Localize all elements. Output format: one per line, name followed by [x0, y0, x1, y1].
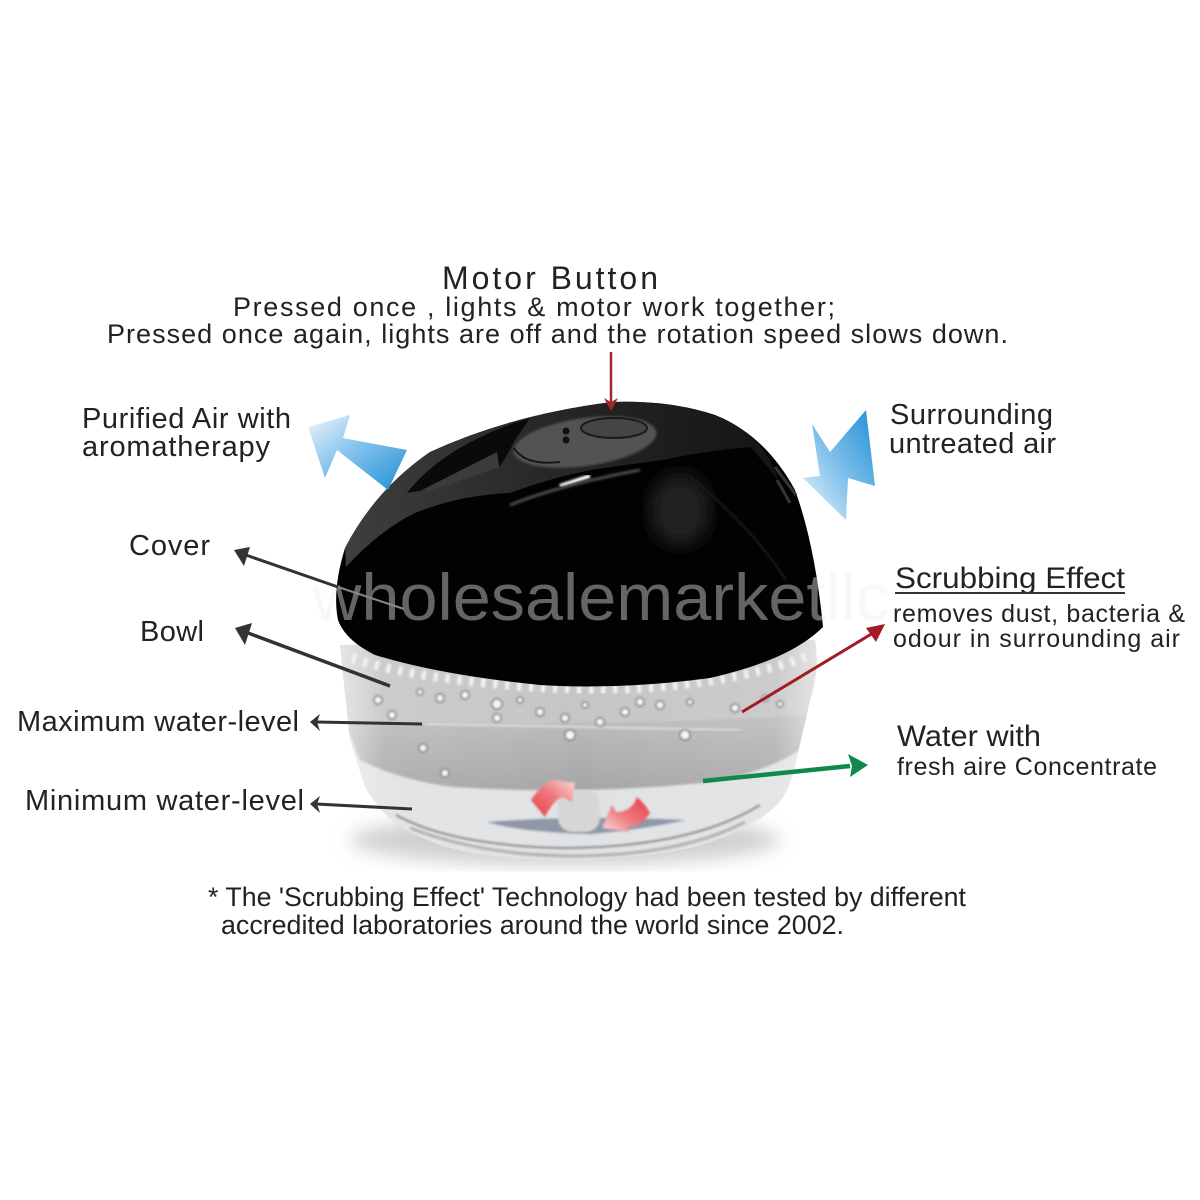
icon: rotating red arrows [531, 780, 650, 832]
glass bowl [340, 640, 817, 860]
upper bubbly rim [335, 640, 825, 735]
control disc [510, 408, 660, 476]
arrow: motor button pointer [604, 352, 618, 411]
power button [581, 418, 647, 438]
watermark on cover: wholesalemarketllc [311, 560, 890, 634]
arrow: water pointer [703, 754, 868, 781]
heading: motor button [107, 260, 1008, 349]
arrow: incoming untreated air [803, 410, 875, 520]
illustration: air purifier [336, 402, 823, 872]
label: bowl: Bowl [140, 616, 204, 648]
heading: motor button: Pressed once again, lights are off and the rotation speed slows down. [107, 319, 1008, 349]
shadow [350, 814, 780, 866]
arrow: maximum level pointer [310, 714, 422, 731]
base strip [487, 818, 686, 834]
watermark: faint part on white: wholesalemarketllc [311, 560, 890, 634]
label: scrubbing effect: odour in surrounding air [893, 625, 1180, 653]
arrow: minimum level pointer [310, 796, 412, 813]
label: minimum water-level: Minimum water-level [25, 785, 304, 817]
arrow: outgoing purified air [308, 415, 407, 490]
label: surrounding air: untreated air [889, 428, 1056, 460]
label: water with concentrate: fresh aire Concentrate [897, 753, 1157, 781]
glass rings [396, 805, 760, 848]
label: purified air: Purified Air with [82, 403, 291, 435]
label: purified air [82, 403, 291, 463]
air vent [407, 418, 530, 493]
label: purified air: aromatherapy [82, 431, 270, 463]
arrow: bowl pointer [235, 623, 390, 686]
bubbles [374, 689, 783, 777]
label: water with concentrate: Water with [897, 720, 1041, 753]
edge highlight [340, 640, 816, 790]
side panel shading [650, 474, 710, 546]
heading: motor button: Pressed once , lights & motor work together; [233, 292, 835, 322]
label: scrubbing effect [893, 562, 1185, 653]
label: surrounding air: Surrounding [890, 399, 1053, 431]
footnote [208, 882, 966, 940]
label: scrubbing effect: removes dust, bacteria & [893, 600, 1185, 628]
top band [345, 402, 778, 567]
footnote: accredited laboratories around the world since 2002. [221, 910, 844, 940]
heading: motor button: Motor Button [442, 260, 658, 296]
label: water with concentrate [897, 720, 1157, 781]
label: scrubbing effect: Scrubbing Effect [895, 562, 1126, 595]
footnote: * The 'Scrubbing Effect' Technology had been tested by different [208, 882, 966, 912]
label: surrounding air [889, 399, 1056, 460]
label: cover: Cover [129, 530, 210, 562]
label: maximum water-level: Maximum water-level [17, 706, 299, 738]
arrow: scrubbing effect pointer [742, 624, 885, 712]
black cover [336, 402, 823, 686]
arrow: cover pointer [234, 547, 404, 609]
water band [345, 715, 815, 790]
